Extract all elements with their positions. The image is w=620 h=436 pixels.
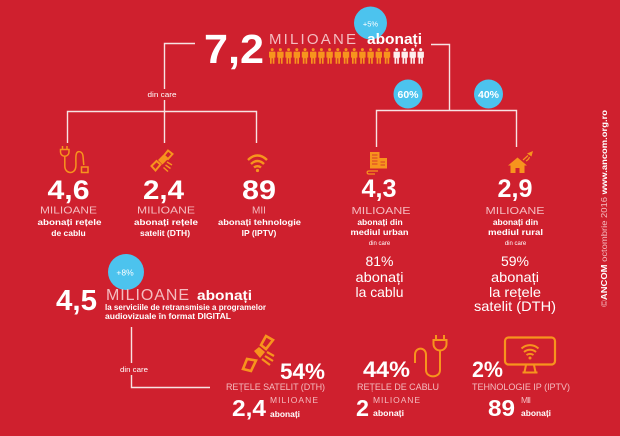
column: cable: MILIOANE xyxy=(40,206,97,216)
column: urban: abonați din xyxy=(357,217,403,227)
column: urban: din care xyxy=(369,241,391,247)
digital stat: IPTV: abonați xyxy=(521,408,551,418)
digital stat: cable: 2 xyxy=(356,395,369,421)
label: din care: din care xyxy=(148,90,176,99)
column: rural: 2,9 xyxy=(498,175,532,203)
column: urban: la cablu xyxy=(356,284,404,300)
column: satellite: MILIOANE xyxy=(137,206,195,216)
digital heading: 4,5 milioane abonati: abonați xyxy=(197,287,252,303)
column: rural: MILIOANE xyxy=(486,206,545,217)
icon: house with antenna xyxy=(508,151,533,173)
digital stat: satellite: abonați xyxy=(270,409,300,419)
column: urban: 81% xyxy=(366,253,394,269)
digital stat: IPTV xyxy=(472,338,570,421)
column: rural: satelit (DTH) xyxy=(474,298,556,314)
headline: 7,2 milioane abonati xyxy=(204,26,422,72)
column: rural xyxy=(474,151,556,314)
digital stat: IPTV: 2% xyxy=(472,357,503,382)
badge: 40% xyxy=(474,80,503,108)
tree connector: right branch xyxy=(376,44,516,147)
column: urban: abonați xyxy=(356,269,404,285)
column: rural: la rețele xyxy=(489,284,541,300)
column: satellite: abonați rețele xyxy=(134,217,198,227)
badge: 40%: 40% xyxy=(478,89,500,101)
icon: television with wifi xyxy=(505,338,555,372)
digital heading: 4,5 milioane abonati: 4,5 xyxy=(56,285,97,317)
tree connector: left branch xyxy=(68,44,256,143)
headline: 7,2 milioane abonati: MILIOANE xyxy=(269,31,356,48)
digital stat: cable: REȚELE DE CABLU xyxy=(357,382,439,392)
digital stat: satellite: MILIOANE xyxy=(270,395,318,405)
digital stat: IPTV: 89 xyxy=(488,395,515,421)
digital heading: 4,5 milioane abonati: MILIOANE xyxy=(106,287,189,304)
icon: wifi xyxy=(248,156,267,172)
column: IPTV xyxy=(218,156,301,238)
column: rural: abonați din xyxy=(493,217,538,227)
column: urban: mediul urban xyxy=(350,227,408,237)
digital stat: cable: 44% xyxy=(363,357,410,382)
column: IPTV: abonați tehnologie xyxy=(218,217,301,227)
digital stat: cable: MILIOANE xyxy=(373,395,420,405)
digital stat: cable xyxy=(356,335,446,421)
digital stat: IPTV: TEHNOLOGIE IP (IPTV) xyxy=(472,382,570,392)
icon: big satellite xyxy=(243,336,274,371)
digital stat: satellite xyxy=(226,336,325,421)
column: satellite: satelit (DTH) xyxy=(140,228,190,238)
column: urban xyxy=(350,152,411,300)
digital stat: cable: abonați xyxy=(373,408,404,418)
digital heading: 4,5 milioane abonati xyxy=(56,254,266,321)
headline: 7,2 milioane abonati: abonați xyxy=(367,31,422,48)
column: rural: abonați xyxy=(491,269,539,285)
digital stat: satellite: 54% xyxy=(280,359,325,384)
column: rural: din care xyxy=(505,241,527,247)
connector: digital breakdown xyxy=(132,327,210,388)
digital stat: satellite: REȚELE SATELIT (DTH) xyxy=(226,382,325,392)
column: urban: MILIOANE xyxy=(352,206,411,217)
column: satellite: 2,4 xyxy=(143,175,184,205)
column: rural: 59% xyxy=(501,253,529,269)
badge: +5% xyxy=(354,6,387,40)
badge: +8% xyxy=(108,254,144,290)
column: cable xyxy=(38,146,102,238)
credit: vertical source line: ©ANCOM octombrie 2016 www.ancom.org.ro xyxy=(599,110,609,307)
digital heading: 4,5 milioane abonati: audiovizuale în format DIGITAL xyxy=(105,312,231,321)
column: IPTV: IP (IPTV) xyxy=(242,228,277,238)
column: IPTV: MII xyxy=(252,206,266,216)
digital stat: satellite: 2,4 xyxy=(232,395,266,421)
icon: satellite xyxy=(152,150,172,172)
icon: big plug and cable xyxy=(415,335,446,376)
badge: +8%: +8% xyxy=(116,268,134,278)
column: satellite xyxy=(134,150,198,238)
icon: city building xyxy=(367,152,387,174)
column: urban: 4,3 xyxy=(362,175,396,203)
digital heading: 4,5 milioane abonati: la serviciile de retransmisie a programelor xyxy=(105,303,266,312)
column: cable: abonați rețele xyxy=(38,217,102,227)
badge: 60%: 60% xyxy=(397,89,419,101)
icon: plug and cable xyxy=(60,146,88,173)
digital stat: IPTV: MII xyxy=(521,395,531,405)
pictogram: people row xyxy=(269,48,424,64)
badge: +5%: +5% xyxy=(363,20,378,28)
column: cable: de cablu xyxy=(51,228,86,238)
column: cable: 4,6 xyxy=(48,175,90,205)
headline: 7,2 milioane abonati: 7,2 xyxy=(204,26,264,72)
label: din care: din care xyxy=(120,365,148,374)
badge: 60% xyxy=(394,80,422,108)
column: IPTV: 89 xyxy=(242,175,276,205)
column: rural: mediul rural xyxy=(488,227,543,237)
